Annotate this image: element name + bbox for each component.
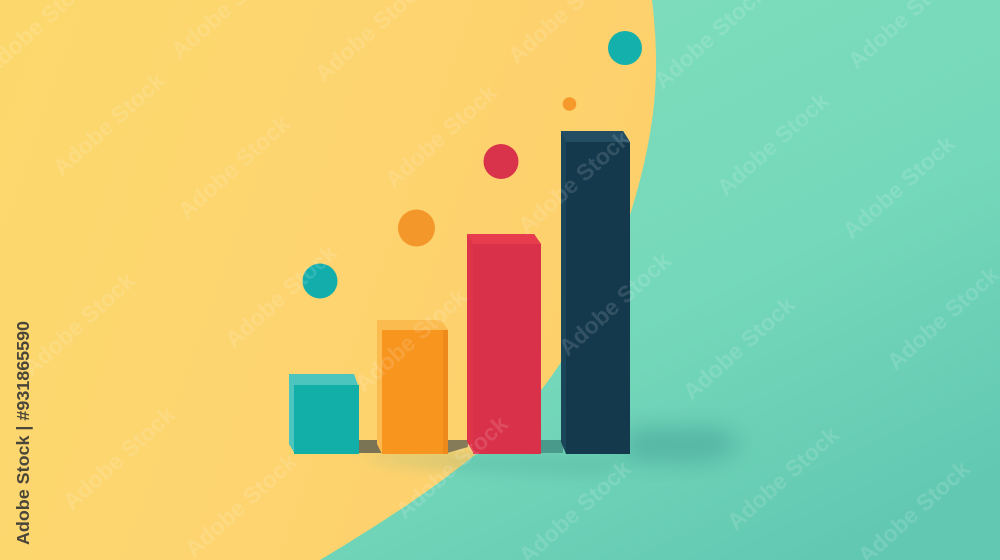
watermarks: Adobe Stock <box>173 110 295 224</box>
watermarks: Adobe Stock <box>722 421 844 535</box>
bar 4: navy block <box>561 131 630 454</box>
watermarks: Adobe Stock <box>350 283 472 397</box>
cast shadow on the floor <box>358 428 745 476</box>
dot: small teal, lower left <box>302 264 338 298</box>
watermarks: Adobe Stock <box>48 67 170 181</box>
watermarks: Adobe Stock <box>678 291 800 405</box>
background: yellow curved panel <box>0 0 656 560</box>
bar 1: teal block <box>289 374 359 454</box>
watermarks: Adobe Stock <box>220 239 342 353</box>
dot: orange <box>398 210 435 246</box>
watermarks: Adobe Stock <box>58 401 180 515</box>
bar 3: red block <box>467 234 541 454</box>
watermarks: Adobe Stock <box>513 125 635 239</box>
dot: red <box>484 144 518 179</box>
dot: small orange <box>563 97 576 111</box>
dot: teal, top <box>608 31 642 65</box>
watermarks: Adobe Stock <box>712 87 834 201</box>
watermarks: Adobe Stock <box>838 130 960 244</box>
watermarks: Adobe Stock <box>180 448 302 560</box>
stock credit label: Adobe Stock | #931865590 <box>13 321 33 545</box>
watermarks: Adobe Stock <box>391 410 513 524</box>
watermarks: Adobe Stock <box>554 247 676 361</box>
watermarks: Adobe Stock <box>882 261 1000 375</box>
watermarks: Adobe Stock <box>380 79 502 193</box>
watermarks: Adobe Stock <box>18 267 140 381</box>
bar 2: orange block <box>377 320 448 454</box>
